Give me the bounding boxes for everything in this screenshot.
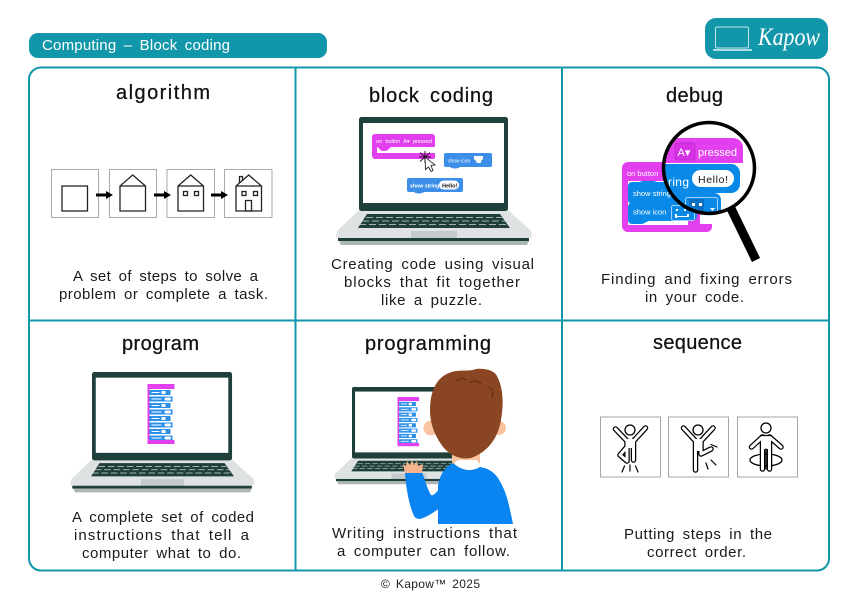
definition: algorithm — [59, 268, 268, 303]
definition: block coding: Creating code using visual — [331, 256, 534, 273]
icon: magnifier handle — [731, 208, 756, 260]
logo: Kapow — [705, 18, 828, 59]
illustration: magnifying glass over code blocks: ring — [668, 175, 689, 189]
heading: sequence: sequence — [653, 332, 742, 354]
boy: ears and neck — [424, 420, 438, 436]
icon: figure jumping — [616, 425, 646, 472]
illustration: laptop with code blocks: on button A▾ pressed — [376, 139, 432, 145]
definition: algorithm: problem or complete a task. — [59, 286, 268, 303]
illustration: magnifying glass over code blocks: on button — [627, 169, 658, 178]
icon: figure kicking — [684, 425, 717, 470]
illustration: laptop with code blocks — [336, 117, 532, 245]
definition: debug: in your code. — [645, 289, 744, 306]
logo: Kapow: Kapow — [757, 24, 820, 51]
boy: hand — [403, 460, 423, 473]
definition: program — [72, 509, 254, 562]
glossary grid frame — [29, 68, 829, 570]
boy: shirt — [438, 463, 513, 524]
panel: block coding — [331, 85, 534, 309]
definition: block coding — [331, 256, 534, 309]
definition: sequence: Putting steps in the — [624, 526, 772, 543]
definition: programming — [332, 525, 518, 560]
definition: program: instructions that tell a — [74, 527, 250, 544]
illustration: laptop with code blocks: Hello! — [442, 184, 457, 190]
heading: block coding: block coding — [369, 85, 493, 107]
title bar: Computing – Block coding — [42, 37, 230, 54]
definition: block coding: like a puzzle. — [381, 292, 482, 309]
diagram: drawing a house in steps — [52, 170, 272, 218]
definition: programming: Writing instructions that — [332, 525, 518, 542]
definition: program: A complete set of coded — [72, 509, 254, 526]
definition: programming: a computer can follow. — [337, 543, 510, 560]
diagram: three movement steps — [600, 417, 798, 477]
illustration: magnifying glass over code blocks: show string — [633, 189, 671, 198]
illustration: magnifying glass over code blocks: pressed — [698, 147, 737, 159]
definition: program: computer what to do. — [82, 545, 241, 562]
illustration: magnifying glass over code blocks: show icon — [633, 208, 666, 216]
illustration: laptop with complete program — [70, 372, 255, 492]
panel: algorithm — [52, 82, 272, 303]
arrows between steps — [96, 191, 228, 199]
definition: algorithm: A set of steps to solve a — [73, 268, 259, 285]
illustration: boy coding at a laptop — [335, 369, 513, 524]
illustration: magnifying glass over code blocks: Hello! — [698, 174, 728, 186]
definition: debug: Finding and fixing errors — [601, 271, 792, 288]
definition: sequence — [624, 526, 772, 561]
panel: sequence — [600, 332, 798, 561]
icon: figure with hoop — [750, 423, 782, 469]
illustration: magnifying glass over code blocks: A▾ — [678, 147, 691, 159]
panel: debug — [601, 85, 792, 306]
panel: program — [70, 333, 255, 562]
definition: debug — [601, 271, 792, 306]
heading: program: program — [122, 333, 199, 355]
illustration: laptop with code blocks: show icon — [448, 158, 470, 164]
heading: debug: debug — [666, 85, 723, 107]
heading: algorithm: algorithm — [116, 82, 210, 104]
boy: sleeve — [405, 472, 447, 519]
panel: programming — [332, 333, 518, 560]
definition: block coding: blocks that fit together — [344, 274, 520, 291]
icon: mouse cursor — [419, 151, 435, 172]
footer: copyright: © Kapow™ 2025 — [381, 577, 480, 591]
boy: hair — [430, 369, 503, 459]
heading: programming: programming — [365, 333, 491, 355]
illustration: laptop with code blocks: show string — [410, 184, 439, 190]
title bar — [29, 33, 327, 58]
definition: sequence: correct order. — [647, 544, 746, 561]
illustration: magnifying glass over code blocks — [622, 122, 756, 260]
